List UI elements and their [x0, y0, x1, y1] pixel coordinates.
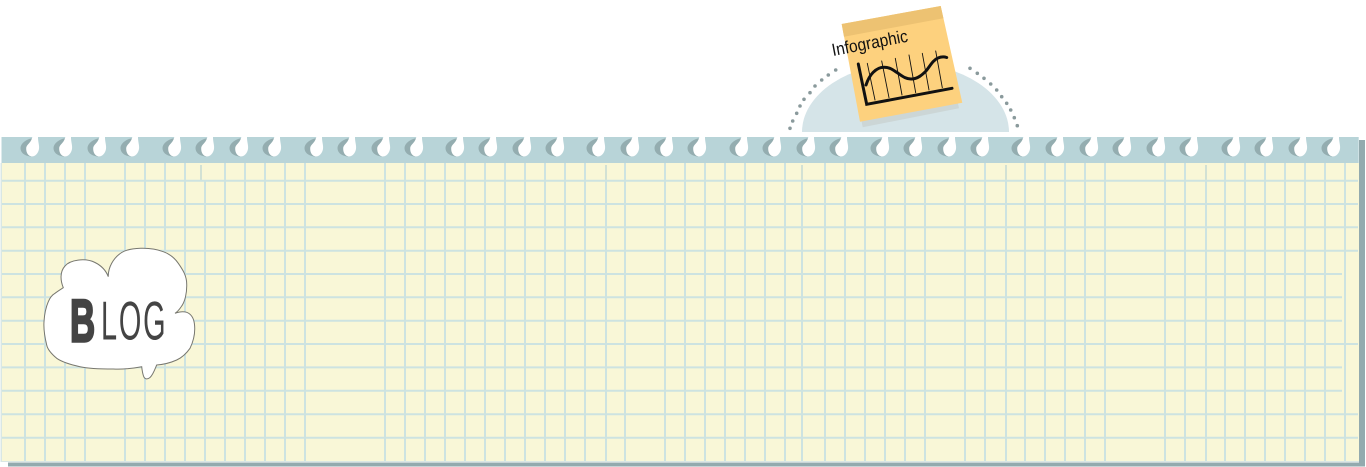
note chart — [858, 51, 952, 104]
dotted arc — [788, 66, 1019, 130]
dome behind note — [802, 63, 1009, 132]
blog wordmark: LOG — [101, 291, 167, 352]
note shadow — [846, 40, 959, 127]
bubble outline — [44, 248, 195, 379]
note body — [842, 6, 962, 122]
note top band — [842, 6, 943, 37]
blog speech bubble — [44, 248, 195, 379]
note label: Infographic — [830, 26, 910, 60]
blog wordmark — [70, 289, 167, 355]
sticky note — [842, 6, 962, 127]
notebook paper — [0, 163, 1359, 462]
binding strip with ring holes — [2, 136, 1359, 163]
blog wordmark: B — [70, 289, 95, 355]
notebook shadow — [8, 140, 1365, 466]
